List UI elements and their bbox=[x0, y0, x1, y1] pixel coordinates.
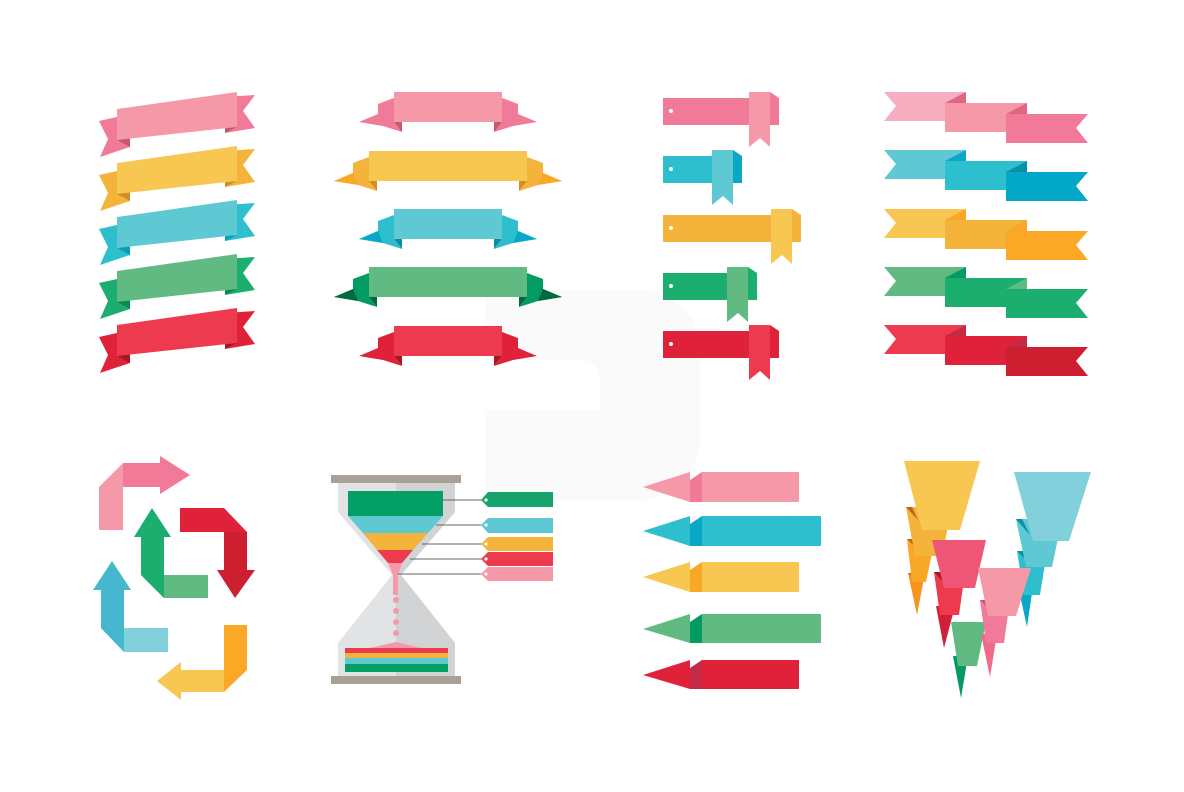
tag green bbox=[663, 267, 757, 322]
arrow orange bbox=[157, 625, 247, 700]
tag yellow bbox=[663, 209, 801, 264]
stack yellow bbox=[904, 461, 980, 615]
banner yellow bbox=[643, 562, 799, 592]
tag cyan bbox=[663, 150, 742, 205]
panel: straight ribbons bbox=[334, 92, 562, 366]
panel: bookmark tags bbox=[663, 92, 801, 380]
ribbon yellow bbox=[99, 146, 255, 211]
banner cyan bbox=[643, 516, 821, 546]
panel: cycle arrows bbox=[93, 456, 255, 700]
arrow blue bbox=[93, 561, 168, 652]
hourglass sand top bbox=[348, 491, 443, 636]
stack red bbox=[932, 540, 986, 648]
panel: arrow banners bbox=[643, 472, 821, 689]
banner red bbox=[643, 660, 799, 689]
ribbon yellow bbox=[334, 151, 562, 191]
stack pink bbox=[978, 568, 1031, 677]
stepped yellow bbox=[884, 209, 1088, 260]
hourglass labels bbox=[398, 492, 553, 581]
panel: stepped ribbons bbox=[884, 92, 1088, 376]
arrow green bbox=[134, 508, 208, 598]
arrow red bbox=[180, 508, 255, 598]
banner green bbox=[643, 614, 821, 643]
stepped red bbox=[884, 325, 1088, 376]
ribbon red bbox=[359, 326, 537, 366]
stepped cyan bbox=[884, 150, 1088, 201]
ribbon green bbox=[334, 267, 562, 307]
arrow pink bbox=[99, 456, 190, 530]
ribbon cyan bbox=[99, 200, 255, 265]
panel: hourglass bbox=[331, 475, 553, 684]
ribbon pink bbox=[99, 92, 255, 157]
hourglass sand bottom bbox=[345, 642, 448, 672]
ribbon green bbox=[99, 254, 255, 319]
panel: slanted ribbons bbox=[99, 92, 255, 373]
panel: triangle stacks bbox=[904, 461, 1091, 698]
stack cyan bbox=[1014, 472, 1091, 627]
watermark bbox=[485, 290, 700, 500]
stack green bbox=[951, 622, 986, 698]
stepped pink bbox=[884, 92, 1088, 143]
hourglass frame bbox=[331, 475, 461, 684]
ribbon cyan bbox=[359, 209, 537, 249]
ribbon pink bbox=[359, 92, 537, 132]
ribbon red bbox=[99, 308, 255, 373]
banner pink bbox=[643, 472, 799, 502]
tag pink bbox=[663, 92, 779, 147]
tag red bbox=[663, 325, 779, 380]
stepped green bbox=[884, 267, 1088, 318]
